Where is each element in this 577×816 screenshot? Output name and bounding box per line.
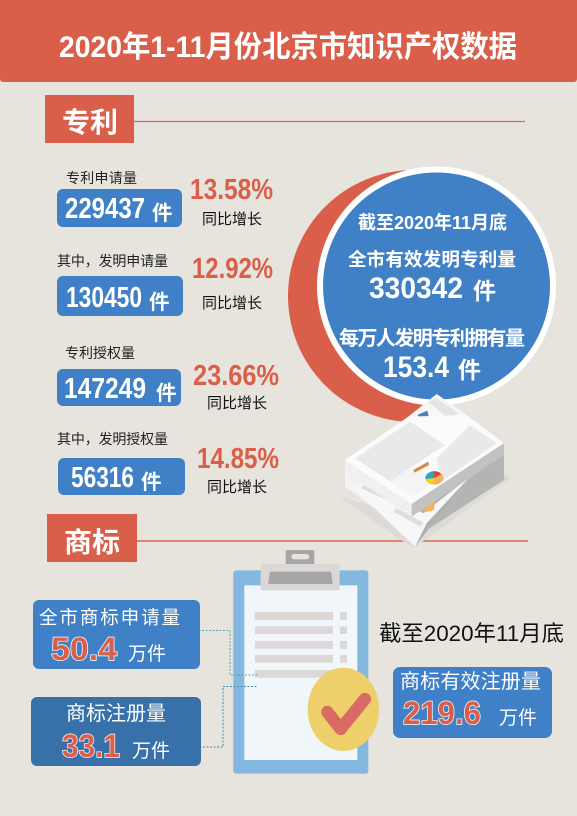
circle callout: effective invention patents: 全市有效发明专利量 — [348, 249, 516, 270]
date label: 截至2020年11月底 — [379, 621, 564, 646]
icon: clipboard with check badge — [233, 550, 379, 774]
stat: trademark applications: 万件 — [128, 643, 166, 665]
stat: invention applications: 同比增长 — [202, 295, 262, 312]
heading: trademarks: 商标 — [64, 527, 120, 558]
title banner — [0, 0, 577, 82]
stat: effective trademark registrations: 219.6 — [403, 695, 481, 731]
circle callout: effective invention patents: 330342 — [369, 272, 463, 305]
stat: invention grants: 56316 — [71, 462, 134, 494]
stat: patent applications: 229437 — [65, 193, 145, 225]
stat: patent applications: 专利申请量 — [66, 170, 137, 186]
circle callout: effective invention patents: 每万人发明专利拥有量 — [339, 327, 525, 350]
stat: trademark registrations: 万件 — [132, 740, 170, 762]
stat: trademark registrations: 商标注册量 — [66, 702, 166, 725]
circle callout: effective invention patents: 件 — [473, 278, 496, 304]
stat: invention grants: 其中，发明授权量 — [57, 431, 168, 447]
stat: effective trademark registrations: 商标有效注册量 — [400, 670, 541, 693]
stat: patent grants: 23.66% — [193, 360, 279, 392]
circle callout: effective invention patents: 截至2020年11月底 — [358, 212, 507, 233]
stat: invention grants: 同比增长 — [207, 479, 267, 496]
stat: patent applications: 13.58% — [190, 174, 273, 206]
stat: invention applications: 12.92% — [192, 253, 273, 285]
circle callout: effective invention patents — [288, 166, 556, 422]
stat: invention grants — [57, 431, 279, 496]
stat: effective trademark registrations: 万件 — [499, 707, 537, 729]
stat: patent grants: 专利授权量 — [65, 345, 135, 361]
stat: invention applications — [57, 253, 273, 316]
icon: stack of papers — [338, 394, 511, 548]
heading: patents — [45, 95, 525, 143]
stat: invention applications: 件 — [149, 291, 170, 314]
stat: effective trademark registrations — [393, 667, 552, 738]
stat: trademark applications: 50.4 — [51, 631, 117, 667]
stat: patent grants: 同比增长 — [207, 395, 267, 412]
connector lines — [182, 630, 258, 747]
stat: trademark registrations: 33.1 — [62, 728, 120, 764]
stat: patent applications: 同比增长 — [202, 211, 262, 228]
stat: trademark registrations — [31, 697, 201, 766]
heading: trademarks — [47, 514, 528, 562]
circle callout: effective invention patents: 件 — [458, 357, 481, 383]
stat: trademark applications: 全市商标申请量 — [39, 607, 180, 628]
title: 2020年1-11月份北京市知识产权数据 — [59, 31, 517, 64]
stat: patent applications: 件 — [152, 202, 172, 225]
stat: patent grants: 件 — [156, 382, 176, 405]
stat: invention applications: 其中，发明申请量 — [57, 253, 168, 269]
stat: invention grants: 14.85% — [197, 443, 279, 475]
stat: invention applications: 130450 — [66, 282, 142, 314]
stat: invention grants: 件 — [141, 471, 162, 494]
stat: patent applications — [57, 170, 273, 228]
circle callout: effective invention patents: 153.4 — [383, 351, 449, 384]
stat: patent grants — [57, 345, 279, 412]
heading: patents: 专利 — [62, 107, 118, 138]
stat: trademark applications — [33, 600, 200, 669]
stat: patent grants: 147249 — [64, 373, 146, 405]
